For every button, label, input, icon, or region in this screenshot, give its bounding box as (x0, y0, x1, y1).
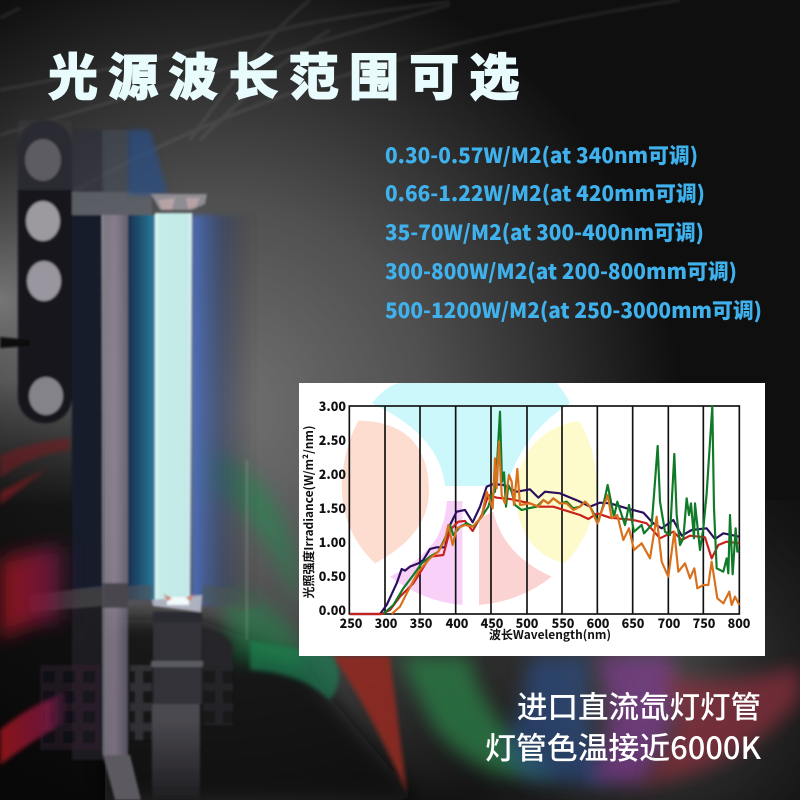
x-axis tick labels: 500 (516, 613, 539, 632)
bottom electrode and holder (151, 594, 232, 800)
grid floor (40, 660, 233, 750)
lavender rail (102, 215, 128, 755)
x-axis title: 波长Wavelength(nm) (489, 626, 611, 643)
chart decoration: pastel colour wheel (342, 383, 597, 605)
curve: navy (350, 484, 739, 614)
x-axis tick labels: 350 (410, 613, 433, 632)
x-axis tick labels (340, 613, 751, 632)
photo: xenon lamp in test chamber (0, 120, 262, 800)
x-axis tick labels: 750 (693, 613, 716, 632)
y-axis tick labels: 1.00 (319, 532, 346, 551)
curve: red (350, 495, 739, 614)
y-axis tick labels: 2.00 (319, 464, 346, 483)
x-axis tick labels: 450 (481, 613, 504, 632)
blue strip left of tube (128, 215, 155, 600)
y-axis tick labels (319, 396, 346, 619)
y-axis tick labels: 2.50 (319, 430, 346, 449)
glow right of tube (192, 215, 257, 605)
spec line 2: 0.66-1.22W/M2(at 420mm可调) (385, 178, 705, 208)
title: 光源波长范围可选 (48, 38, 530, 110)
x-axis tick labels: 300 (375, 613, 398, 632)
caption: lamp description (485, 683, 762, 768)
curve: green (383, 406, 739, 614)
x-axis tick labels: 800 (728, 613, 751, 632)
plot frame and gridlines (349, 406, 739, 614)
curve: orange (392, 442, 739, 614)
horizontal bar (30, 586, 102, 612)
x-axis tick labels: 550 (552, 613, 575, 632)
x-axis tick labels: 400 (446, 613, 469, 632)
spec line 4: 300-800W/M2(at 200-800mm可调) (385, 256, 737, 286)
xenon tube (155, 213, 192, 600)
x-axis tick labels: 650 (622, 613, 645, 632)
background swooshes: coloured light ribbons (205, 450, 800, 793)
y-axis tick labels: 1.50 (319, 498, 346, 517)
chart panel: spectral irradiance (299, 383, 765, 656)
x-axis tick labels: 250 (340, 613, 363, 632)
top electrode cap (151, 194, 207, 210)
y-axis title: 光照强度Irradiance(W/m²/nm) (300, 426, 317, 598)
x-axis tick labels: 600 (587, 613, 610, 632)
x-axis tick labels: 700 (658, 613, 681, 632)
spec line 5: 500-1200W/M2(at 250-3000mm可调) (385, 295, 762, 325)
spec list: irradiance ranges (385, 140, 762, 325)
y-axis tick labels: 0.50 (319, 566, 346, 585)
frame column (72, 130, 104, 192)
spectrum curves (350, 406, 739, 614)
y-axis tick labels: 3.00 (319, 396, 346, 415)
caption line 1: 进口直流氙灯灯管 (517, 683, 761, 727)
bracket plate with holes (0, 120, 72, 423)
spec line 1: 0.30-0.57W/M2(at 340nm可调) (385, 140, 698, 170)
left coloured ribbons over photo (0, 438, 72, 765)
y-axis tick labels: 0.00 (319, 600, 346, 619)
spec line 3: 35-70W/M2(at 300-400nm可调) (385, 217, 704, 247)
caption line 2: 灯管色温接近6000K (485, 724, 762, 768)
